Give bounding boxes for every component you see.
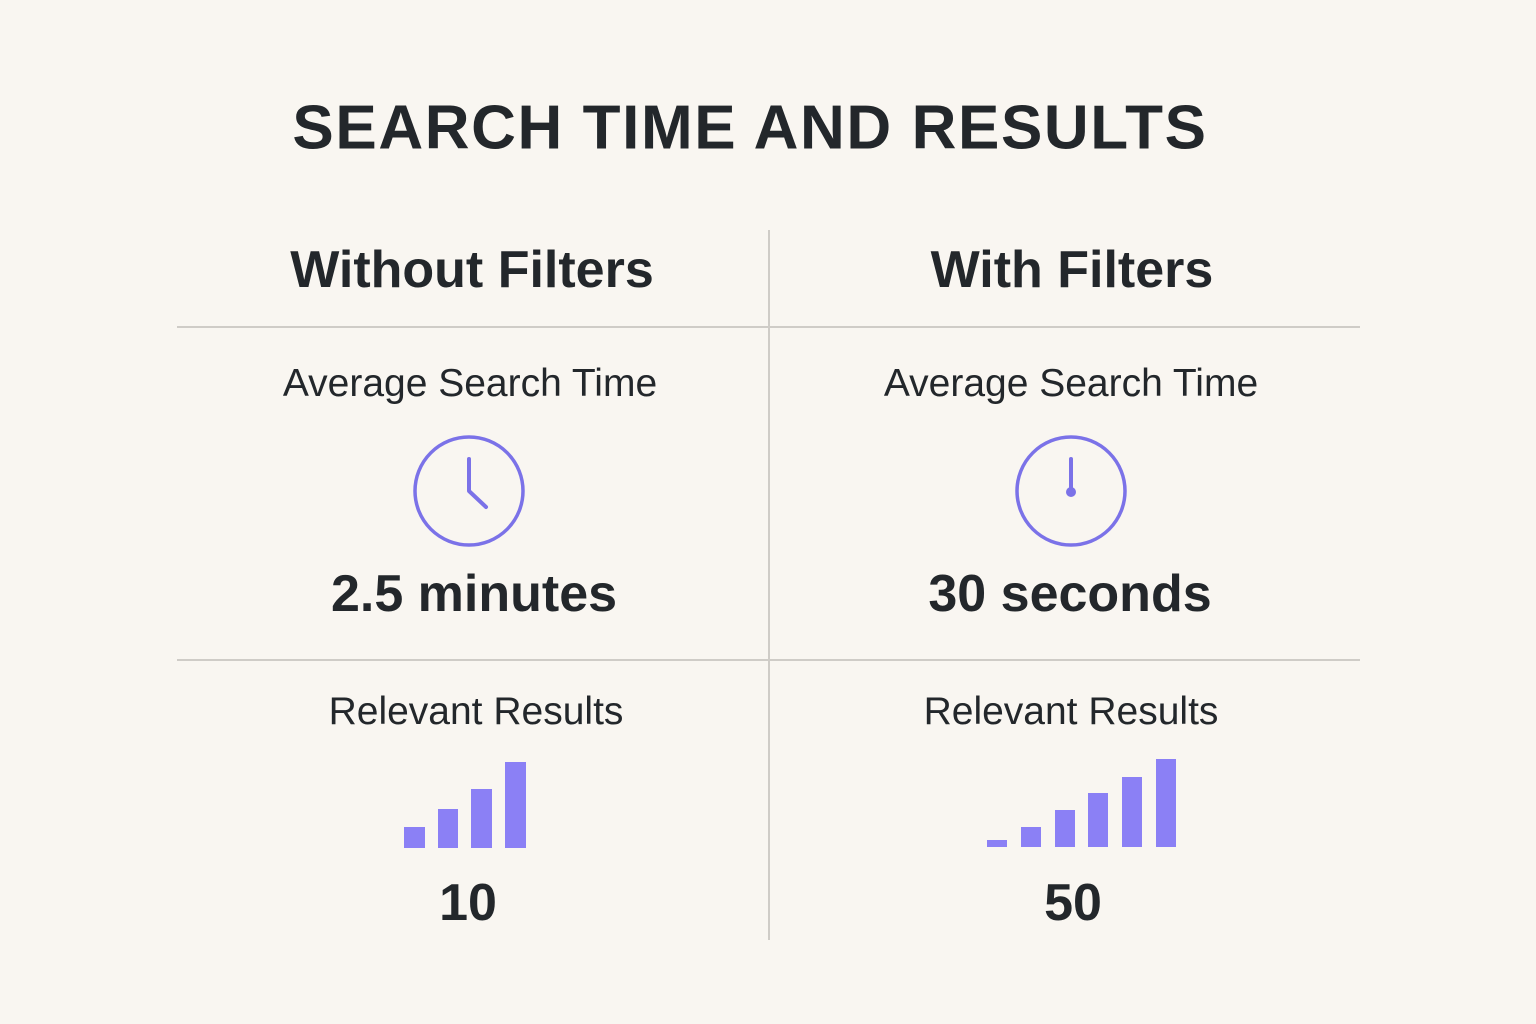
value: 50: 50	[1044, 874, 1102, 932]
panel: without filters	[283, 241, 657, 932]
heading: without filters: Without Filters	[290, 241, 654, 299]
bar chart: 10 results	[404, 762, 526, 848]
label: average search time: Average Search Time	[884, 362, 1258, 405]
value: 30 seconds: 30 seconds	[928, 565, 1212, 623]
panel: with filters	[884, 241, 1258, 932]
heading: with filters: With Filters	[931, 241, 1213, 299]
label: average search time: Average Search Time	[283, 362, 657, 405]
label: relevant results: Relevant Results	[924, 690, 1218, 733]
bar chart: 50 results	[987, 759, 1176, 847]
icon: clock 2.5 min	[413, 435, 525, 547]
title: SEARCH TIME AND RESULTS	[292, 94, 1208, 162]
value: 2.5 minutes: 2.5 minutes	[331, 565, 617, 623]
value: 10: 10	[439, 874, 497, 932]
label: relevant results: Relevant Results	[329, 690, 623, 733]
icon: clock 30 sec	[1015, 435, 1127, 547]
